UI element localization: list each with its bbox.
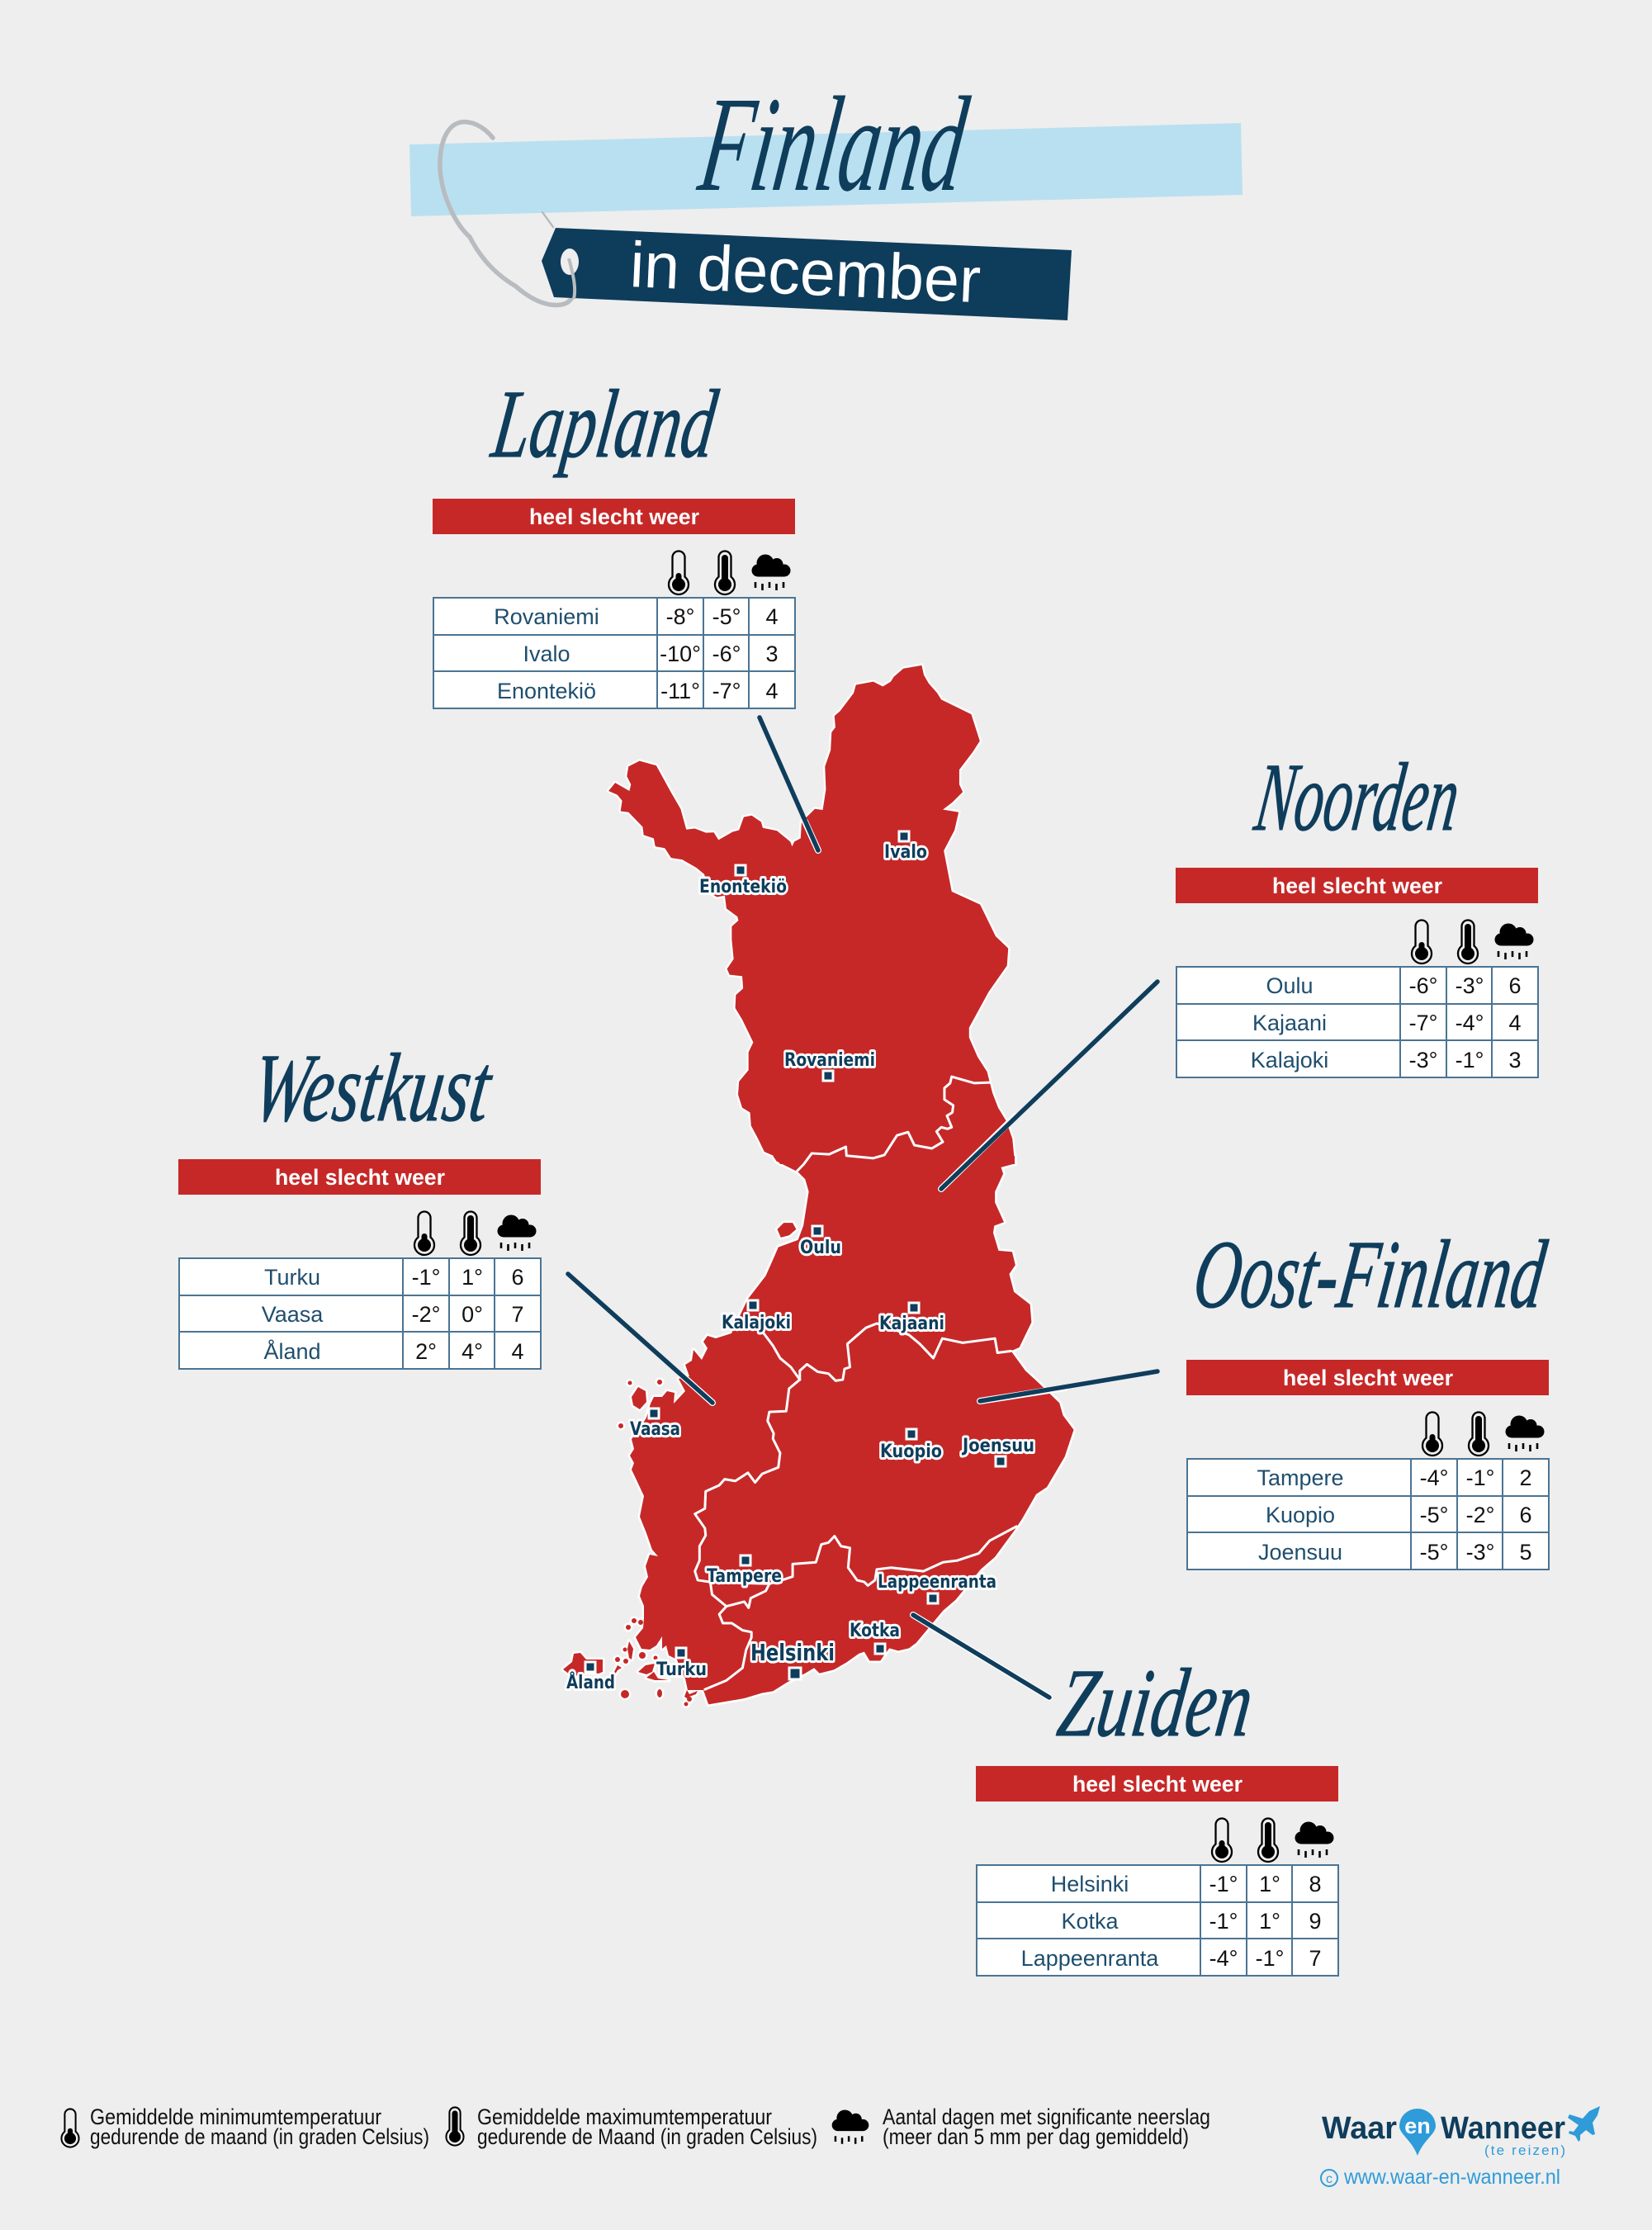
table: 2 [1519, 1465, 1532, 1490]
table [1187, 1459, 1549, 1570]
icon: rain cloud [1506, 1415, 1544, 1451]
table: 4 [765, 679, 779, 703]
table: -3° [1456, 973, 1484, 998]
logo: Waar en Wanneer [1321, 2106, 1600, 2189]
icon: min thermometer [1212, 1818, 1232, 1862]
city: Helsinki [750, 1639, 835, 1679]
table: Kalajoki [1251, 1048, 1328, 1072]
logo word: Wanneer: Wanneer [1441, 2111, 1565, 2146]
city: Kalajoki: Kalajoki [722, 1313, 791, 1333]
heading: Lapland: Lapland [485, 370, 723, 478]
icon: rain cloud [1295, 1821, 1334, 1858]
subtitle: in december [628, 228, 982, 316]
table [433, 598, 795, 708]
heading: Noorden: Noorden [1249, 743, 1466, 851]
panel: Westkust [178, 1034, 541, 1369]
table: Turku [264, 1265, 320, 1290]
city: Kotka [850, 1621, 900, 1654]
table: -11° [660, 679, 700, 703]
table: 4° [462, 1339, 483, 1364]
rating bar [433, 499, 795, 534]
rating bar: heel slecht weer [1283, 1366, 1453, 1390]
title block [409, 69, 1243, 320]
city: Joensuu: Joensuu [961, 1436, 1034, 1456]
table: Rovaniemi [494, 604, 599, 629]
rating bar: heel slecht weer [1072, 1772, 1243, 1797]
icon: rain cloud [1494, 923, 1534, 959]
copyright and url: c [1326, 2172, 1332, 2186]
table: Kajaani [1252, 1011, 1327, 1035]
table: 9 [1309, 1909, 1322, 1934]
table: 6 [1508, 973, 1522, 998]
legend text: min temperature: Gemiddelde minimumtemperatuur [90, 2105, 381, 2129]
map outline halo [563, 665, 1074, 1707]
table: 7 [1309, 1946, 1322, 1971]
table: -4° [1420, 1465, 1448, 1490]
table [1176, 967, 1538, 1077]
table: -1° [1466, 1465, 1494, 1490]
logo tagline: (te reizen) [1484, 2142, 1565, 2158]
table: -2° [1466, 1503, 1494, 1527]
icon: max thermometer [1469, 1412, 1489, 1456]
heading: Zuiden: Zuiden [1052, 1649, 1260, 1757]
table: -5° [1420, 1540, 1448, 1565]
table: 8 [1309, 1872, 1322, 1896]
table: -3° [1409, 1048, 1437, 1072]
city: Kajaani [879, 1303, 944, 1334]
icon: legend min thermometer [61, 2109, 79, 2147]
table: Åland [263, 1338, 321, 1364]
icon: legend rain cloud [832, 2109, 869, 2144]
icon: min thermometer [414, 1212, 434, 1255]
city: Ivalo: Ivalo [884, 842, 927, 863]
city: Kuopio [880, 1429, 942, 1462]
heading: Westkust: Westkust [246, 1034, 499, 1142]
city: Enontekiö: Enontekiö [699, 877, 787, 897]
table: Kotka [1061, 1909, 1119, 1934]
city: Tampere [707, 1555, 782, 1587]
icon: max thermometer [715, 552, 735, 594]
city: Rovaniemi [784, 1050, 875, 1081]
city: Ivalo [884, 831, 927, 863]
rating bar [976, 1766, 1338, 1802]
table: -4° [1209, 1946, 1238, 1971]
city: Helsinki: Helsinki [750, 1639, 835, 1666]
legend text: precipitation: (meer dan 5 mm per dag gemiddeld) [883, 2124, 1189, 2149]
table: -6° [712, 642, 741, 666]
table: Ivalo [523, 642, 570, 666]
city: Vaasa: Vaasa [630, 1419, 680, 1440]
icon: legend max thermometer [446, 2107, 464, 2146]
legend text: precipitation: Aantal dagen met significante neerslag [883, 2105, 1210, 2129]
table: -3° [1466, 1540, 1494, 1565]
table: -1° [1209, 1909, 1238, 1934]
icon: plane [1568, 2106, 1600, 2142]
leader line: Lapland [760, 717, 818, 850]
title banner [409, 123, 1243, 216]
city: Turku [656, 1648, 707, 1680]
map land fill [563, 665, 1074, 1707]
panel: Lapland [433, 370, 795, 708]
legend text: min temperature: gedurende de maand (in graden Celsius) [90, 2124, 429, 2149]
table: -6° [1409, 973, 1437, 998]
table: -5° [712, 604, 741, 629]
rating bar: heel slecht weer [529, 504, 699, 529]
table: 3 [765, 642, 779, 666]
table: Lappeenranta [1021, 1946, 1159, 1971]
city: Lappeenranta: Lappeenranta [878, 1572, 996, 1593]
logo word: Waar: Waar [1322, 2111, 1397, 2146]
table: -2° [412, 1302, 440, 1327]
city: Lappeenranta [878, 1572, 996, 1603]
rating bar: heel slecht weer [275, 1165, 445, 1190]
table [179, 1258, 541, 1369]
table: -1° [1209, 1872, 1238, 1896]
logo pin [1399, 2109, 1436, 2156]
map of Finland [563, 665, 1157, 1707]
table: 6 [1519, 1503, 1532, 1527]
city: Joensuu [961, 1436, 1034, 1466]
table [977, 1865, 1338, 1976]
table: Oulu [1266, 973, 1314, 998]
table: 4 [1508, 1011, 1522, 1035]
icon: min thermometer [1422, 1412, 1442, 1456]
panel: Zuiden [976, 1649, 1338, 1976]
city: Kajaani: Kajaani [879, 1314, 944, 1334]
panel: Noorden [1176, 743, 1538, 1077]
city: Turku: Turku [656, 1659, 707, 1680]
leader line: Zuiden [913, 1615, 1049, 1697]
table: 1° [1259, 1909, 1280, 1934]
region borders [695, 1077, 1016, 1689]
icon: max thermometer [461, 1212, 480, 1255]
icon: max thermometer [1258, 1818, 1278, 1862]
city: Oulu [800, 1226, 841, 1258]
table: Kuopio [1266, 1503, 1335, 1527]
title text: Finland [691, 69, 976, 220]
city: Kotka: Kotka [850, 1621, 900, 1641]
icon: min thermometer [669, 552, 689, 594]
table: -10° [660, 642, 701, 666]
city: Åland [566, 1662, 615, 1693]
rating bar [178, 1159, 541, 1195]
icon: min thermometer [1412, 920, 1432, 963]
table: Vaasa [262, 1302, 324, 1327]
icon: rain cloud [751, 555, 791, 590]
table: -1° [1456, 1048, 1484, 1072]
table: -1° [1256, 1946, 1284, 1971]
legend [61, 2105, 1210, 2149]
city: Tampere: Tampere [707, 1566, 782, 1587]
table: 1° [1259, 1872, 1280, 1896]
table: Enontekiö [497, 679, 596, 703]
leader line: Westkust [568, 1274, 712, 1403]
legend text: max temperature: gedurende de Maand (in graden Celsius) [477, 2124, 817, 2149]
copyright and url: www.waar-en-wanneer.nl [1343, 2166, 1560, 2189]
table: 0° [462, 1302, 483, 1327]
leader line: Noorden [941, 982, 1157, 1189]
city: Vaasa [630, 1409, 680, 1440]
table: Tampere [1257, 1465, 1344, 1490]
city: Åland: Åland [566, 1672, 615, 1693]
table: -7° [712, 679, 741, 703]
table: 6 [511, 1265, 524, 1290]
logo pin: en [1404, 2114, 1431, 2138]
table: -7° [1409, 1011, 1437, 1035]
icon: max thermometer [1458, 920, 1478, 963]
panel: Oost-Finland [1186, 1220, 1552, 1570]
city: Rovaniemi: Rovaniemi [784, 1050, 875, 1071]
table: Helsinki [1051, 1872, 1129, 1896]
table: 4 [765, 604, 779, 629]
tag string [440, 122, 575, 305]
rating bar [1186, 1360, 1549, 1395]
table: 2° [415, 1339, 437, 1364]
table: 7 [511, 1302, 524, 1327]
table: -4° [1456, 1011, 1484, 1035]
table: -5° [1420, 1503, 1448, 1527]
navy tag [542, 228, 1072, 320]
table: Joensuu [1258, 1540, 1342, 1565]
leader line: Oost-Finland [980, 1371, 1157, 1401]
table: 4 [511, 1339, 524, 1364]
table: 5 [1519, 1540, 1532, 1565]
table: -1° [412, 1265, 440, 1290]
legend text: max temperature: Gemiddelde maximumtemperatuur [477, 2105, 772, 2129]
icon: rain cloud [497, 1215, 537, 1251]
city: Kuopio: Kuopio [880, 1442, 942, 1462]
rating bar [1176, 868, 1538, 903]
table: -8° [666, 604, 694, 629]
rating bar: heel slecht weer [1272, 874, 1442, 898]
city: Kalajoki [722, 1300, 791, 1333]
table: 1° [462, 1265, 483, 1290]
city: Enontekiö [699, 865, 787, 897]
table: 3 [1508, 1048, 1522, 1072]
city: Oulu: Oulu [800, 1238, 841, 1258]
